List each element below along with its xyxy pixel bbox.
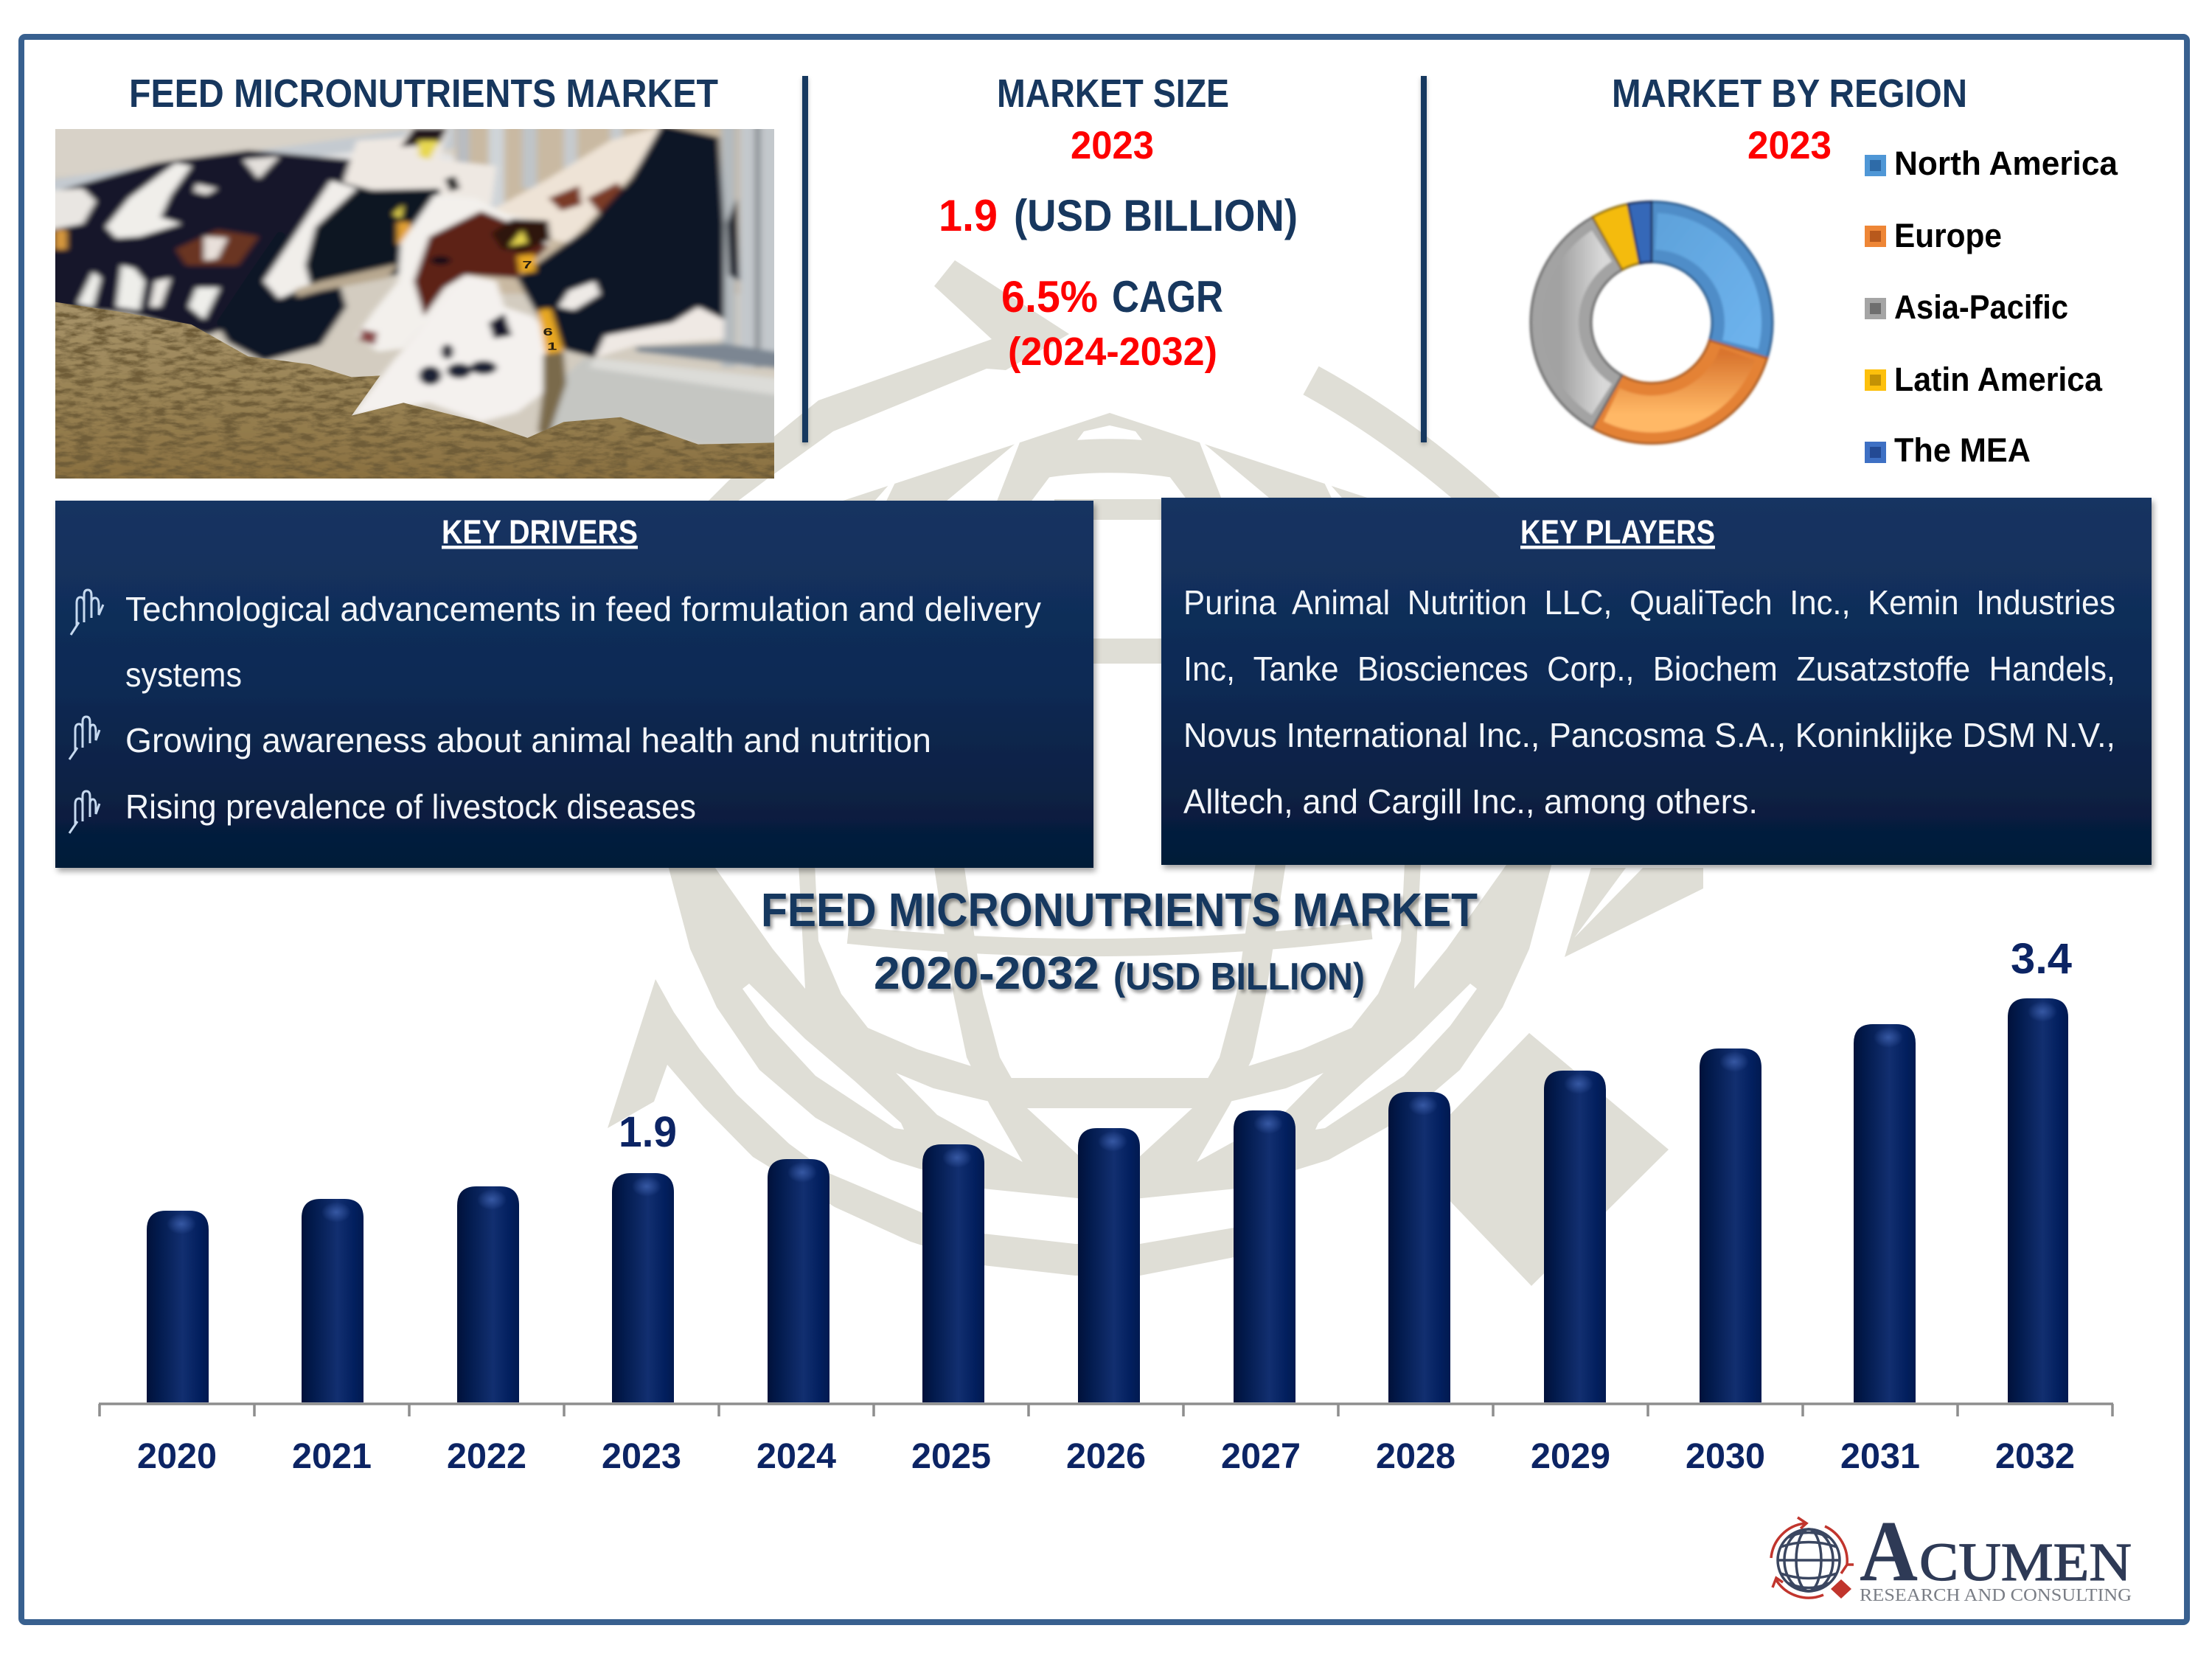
value label 2032: 3.4 [2011, 935, 2072, 983]
market size value: 1.9 [939, 191, 998, 240]
bar 2027 [1234, 1110, 1295, 1402]
year labels: 2029 [1531, 1437, 1610, 1476]
donut: europe [1593, 341, 1767, 444]
watermark: globe lower left [667, 863, 1113, 1202]
bar 2022 [457, 1186, 519, 1402]
watermark: globe top half [688, 380, 1556, 877]
market size heading: MARKET SIZE [997, 72, 1229, 116]
chart title years: 2020-2032 [874, 948, 1099, 999]
chart heading [761, 883, 1478, 999]
year labels: 2022 [447, 1437, 526, 1476]
donut: the mea [1628, 202, 1652, 263]
key players heading: KEY PLAYERS [1520, 513, 1715, 551]
logo globe [1778, 1529, 1840, 1591]
bar 2031 [1854, 1024, 1916, 1402]
logo tagline: RESEARCH AND CONSULTING [1860, 1586, 2132, 1605]
year labels: 2027 [1221, 1437, 1301, 1476]
year labels: 2020 [137, 1437, 217, 1476]
bar 2020 [147, 1211, 209, 1402]
divider: right [1421, 76, 1427, 442]
x axis [99, 1404, 2113, 1416]
logo diamond [1831, 1579, 1851, 1599]
key players line 1: Purina Animal Nutrition LLC, QualiTech Inc., Kemin Industries [1183, 583, 2115, 622]
divider: left [802, 76, 808, 442]
legend: europe: Europe [1894, 217, 2002, 254]
hay pile [55, 302, 774, 479]
legend: asia-pacific: Asia-Pacific [1894, 288, 2068, 326]
icon: chart bullet 2 [69, 717, 100, 759]
year labels: 2028 [1376, 1437, 1455, 1476]
year labels: 2031 [1840, 1437, 1920, 1476]
logo: acumen research and consulting [1771, 1503, 2132, 1605]
market size year: 2023 [1071, 124, 1154, 167]
red-brown cow head [357, 195, 548, 352]
driver 1: Technological advancements in feed formulation and delivery [125, 590, 1041, 628]
black-faced cow [264, 179, 439, 299]
donut: asia-pacific [1531, 217, 1622, 428]
logo arrows [1771, 1517, 1854, 1598]
year labels: 2026 [1066, 1437, 1146, 1476]
key drivers heading: KEY DRIVERS [442, 513, 638, 551]
region heading: MARKET BY REGION [1612, 72, 1967, 116]
year labels: 2024 [757, 1437, 836, 1476]
panel: market by region [1531, 72, 2118, 469]
year labels [137, 1437, 2075, 1476]
ear tag numbers: 6 [543, 327, 553, 338]
key players line 3: Novus International Inc., Pancosma S.A., Koninklijke DSM N.V., [1183, 716, 2115, 754]
watermark: globe top right stripes [1110, 413, 1401, 509]
ear tag numbers: 1 [547, 341, 557, 352]
watermark: top-right arrow band [1311, 380, 1556, 575]
watermark: bottom arrow [608, 979, 1253, 1276]
donut: latin america [1593, 204, 1640, 270]
year labels: 2025 [911, 1437, 991, 1476]
panel: market size [939, 72, 1298, 374]
legend: the mea: The MEA [1894, 431, 2031, 469]
bar 2021 [302, 1199, 364, 1402]
watermark: arrows and diamond [608, 260, 1703, 1286]
year labels: 2032 [1995, 1437, 2075, 1476]
ear tag numbers [522, 259, 557, 352]
top white cow [341, 125, 496, 204]
bar 2026 [1078, 1128, 1140, 1402]
bar 2023 [612, 1173, 674, 1402]
icon: chart bullet 3 [69, 791, 100, 833]
neck white with brown patches [496, 125, 667, 243]
CAGR period: (2024-2032) [1008, 330, 1217, 374]
legend [1865, 145, 2118, 469]
key players line 4: Alltech, and Cargill Inc., among others. [1183, 782, 1758, 821]
donut chart [1531, 202, 1773, 444]
donut: north america [1652, 202, 1773, 358]
watermark: right arrowhead [1565, 868, 1703, 957]
year labels: 2023 [602, 1437, 681, 1476]
bar chart [99, 935, 2113, 1476]
driver 3: Rising prevalence of livestock diseases [125, 787, 696, 826]
watermark: centre triangle and latitude [848, 931, 1371, 1184]
watermark: top-left arrowhead [708, 260, 1069, 501]
trough and rail [543, 358, 796, 448]
watermark: diamond [1408, 1033, 1669, 1286]
dark lying cow [216, 230, 347, 361]
panel: key drivers [55, 501, 1093, 868]
year labels: 2021 [292, 1437, 372, 1476]
logo wordmark rest: CUMEN [1919, 1532, 2132, 1592]
heading: feed micronutrients market: FEED MICRONUTRIENTS MARKET [129, 72, 718, 116]
market size unit: (USD BILLION) [1014, 191, 1298, 240]
icon: chart bullet 1 [71, 590, 103, 635]
CAGR label: CAGR [1112, 272, 1223, 321]
legend: latin america: Latin America [1894, 361, 2103, 398]
key drivers background [55, 501, 1093, 868]
key players background [1161, 498, 2152, 865]
CAGR value: 6.5% [1001, 272, 1098, 321]
bar 2029 [1544, 1071, 1606, 1402]
driver 1 continued: systems [125, 655, 242, 694]
ear tag numbers: 7 [522, 259, 532, 271]
bar 2025 [922, 1144, 984, 1402]
bar 2032 [2008, 998, 2068, 1402]
value label 2023: 1.9 [619, 1108, 677, 1156]
watermark: globe lower right [1106, 863, 1552, 1202]
legend: north america: North America [1894, 145, 2118, 182]
logo wordmark: A [1860, 1503, 1918, 1599]
chart title line 1: FEED MICRONUTRIENTS MARKET [761, 883, 1478, 936]
region year: 2023 [1747, 124, 1832, 167]
watermark: globe top left stripes [818, 413, 1110, 509]
panel: key players [1161, 498, 2152, 865]
front white cow head [352, 275, 564, 422]
chart title unit: (USD BILLION) [1113, 956, 1365, 998]
bar 2030 [1700, 1048, 1761, 1402]
bar 2028 [1388, 1092, 1450, 1402]
far-left dark cows [31, 150, 357, 335]
key players line 2: Inc, Tanke Biosciences Corp., Biochem Zusatzstoffe Handels, [1183, 650, 2115, 688]
driver 2: Growing awareness about animal health and nutrition [125, 721, 931, 759]
year labels: 2030 [1686, 1437, 1765, 1476]
photo: cows feeding on hay [55, 129, 774, 479]
big black cow [517, 125, 724, 358]
bar 2024 [768, 1159, 830, 1402]
